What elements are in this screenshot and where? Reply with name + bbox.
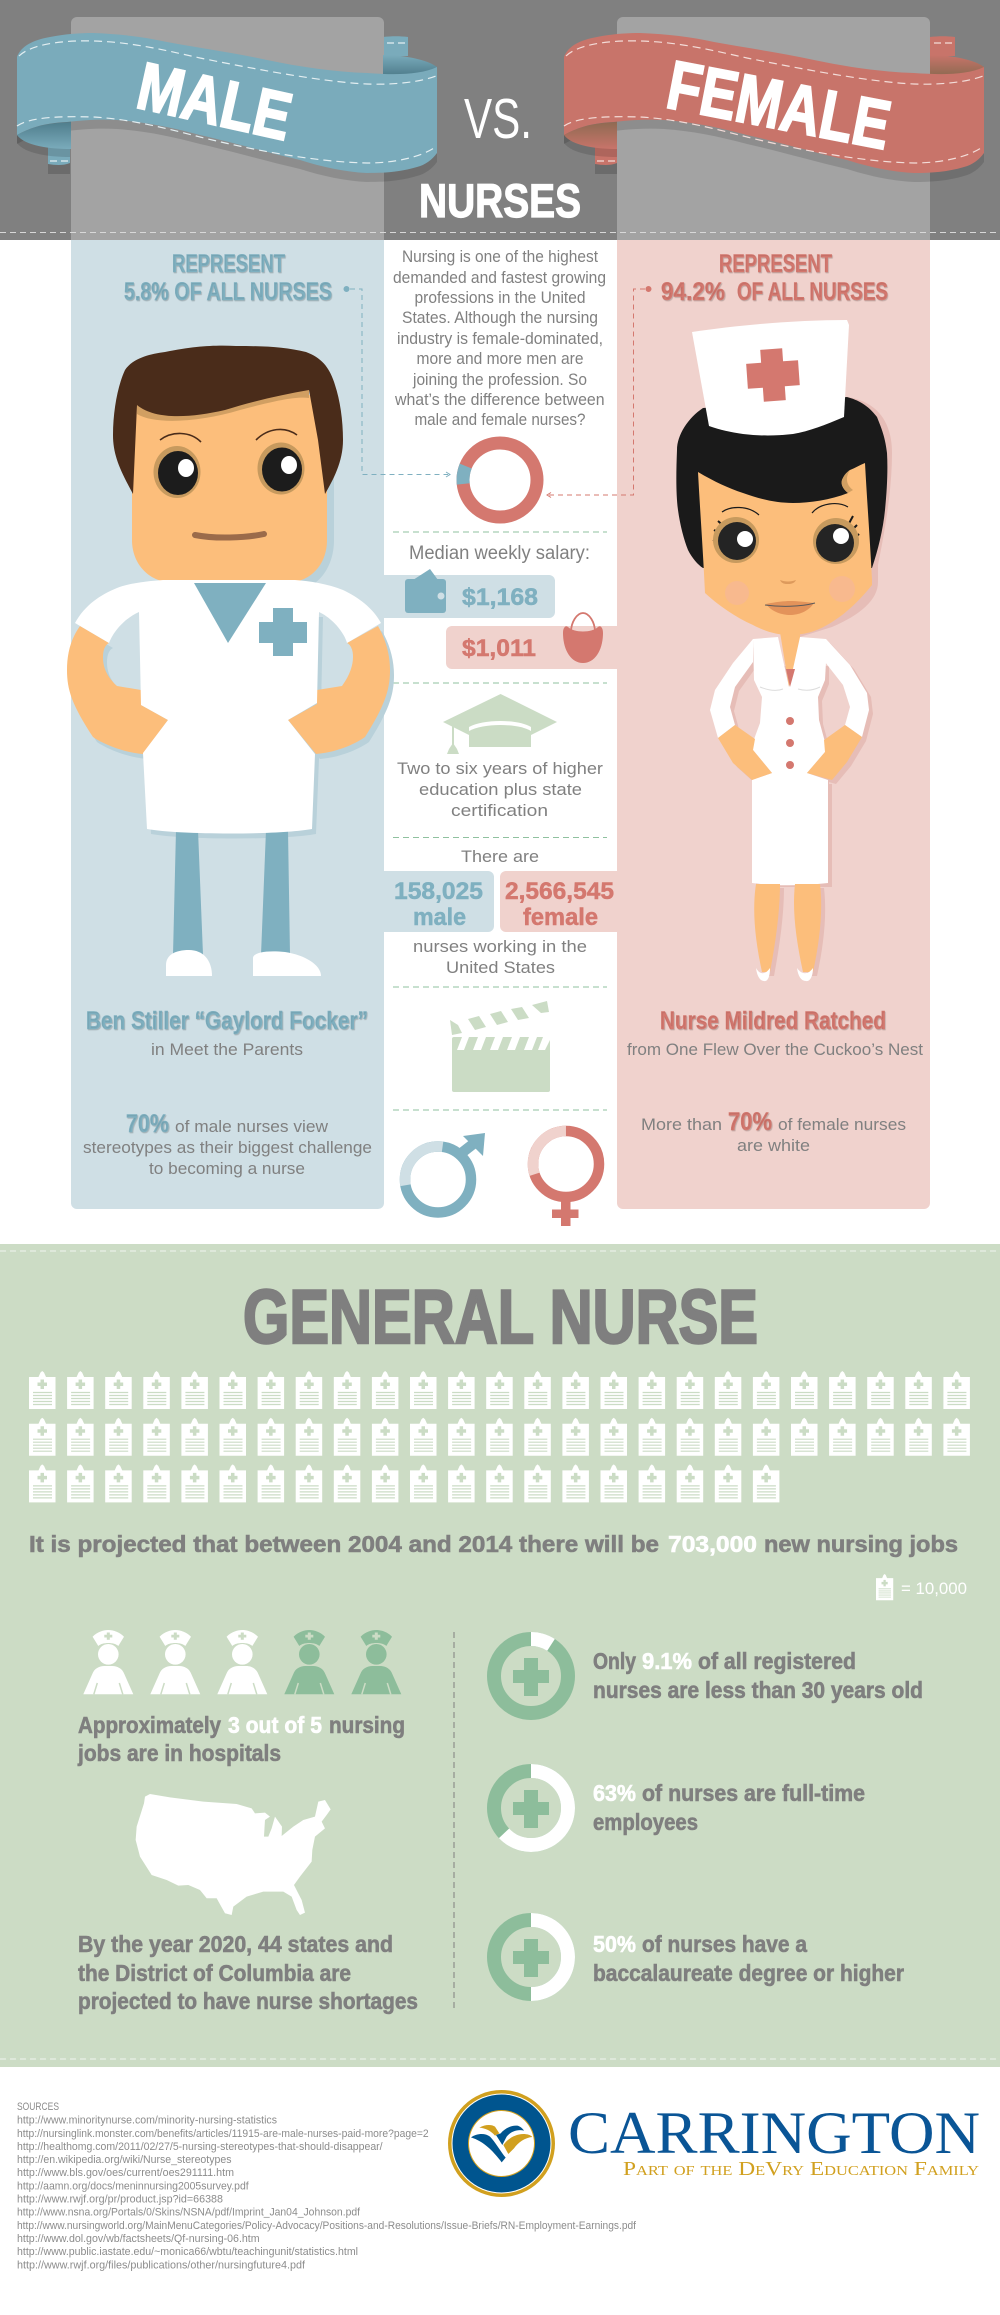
intro paragraph: male and female nurses?: [414, 410, 586, 429]
text: 63%: 63%: [593, 1780, 636, 1806]
caption: Nurse Ratched: from One Flew Over the Cuckoo’s Nest: [627, 1040, 923, 1059]
text: shortages: the District of Columbia are: [78, 1960, 351, 1986]
icon: graduation cap: [443, 694, 557, 754]
count box: male: [384, 871, 494, 932]
text: education: education plus state: [419, 780, 582, 799]
eyes: [154, 442, 304, 498]
icon: purse: [563, 613, 603, 663]
lips: [766, 601, 814, 615]
count box: female: female: [523, 904, 598, 931]
text: working in the US: nurses working in the: [413, 937, 587, 956]
uniform: [710, 637, 869, 885]
legs: [754, 884, 821, 972]
sources: http://healthomg.com/2011/02/27/5-nursing-stereotypes-that-should-disappear/: [17, 2141, 384, 2153]
text: projected jobs: new nursing jobs: [764, 1531, 958, 1557]
intro paragraph: more and more men are: [416, 349, 584, 368]
icon: female symbol: [524, 1122, 608, 1226]
stat: male stereotypes: to becoming a nurse: [149, 1159, 305, 1178]
stat: female race: of female nurses: [778, 1115, 906, 1134]
text: education: [397, 759, 603, 820]
text: projected jobs: [29, 1531, 958, 1557]
title: NURSES: NURSES: [419, 174, 581, 227]
heading: general nurse: GENERAL NURSE: [243, 1275, 758, 1360]
sources: http://www.minoritynurse.com/minority-nursing-statistics: [17, 2114, 277, 2126]
sources: http://www.rwjf.org/pr/product.jsp?id=66388: [17, 2194, 223, 2206]
count box: male: male: [413, 904, 466, 931]
text: projected jobs: 703,000: [668, 1531, 757, 1557]
shadows of arms and coat: [71, 617, 394, 838]
chest cross: [259, 608, 307, 656]
sources: SOURCES: [17, 2101, 59, 2113]
text: hospitals: 3 out of 5: [228, 1712, 322, 1738]
text: education: Two to six years of higher: [397, 759, 603, 778]
legend: clipboard = 10,000: = 10,000: [901, 1579, 967, 1598]
title: FEMALE: FEMALE: [661, 46, 897, 164]
head shadow: [138, 400, 334, 590]
stat: male represent: [124, 250, 332, 306]
text: 63%: [593, 1780, 865, 1835]
illustration: female nurse: [676, 320, 892, 981]
ribbon tails: male: [48, 36, 408, 174]
text: projected jobs: It is projected that between 2004 and 2014 there will be: [29, 1531, 659, 1557]
mouth: [195, 534, 264, 538]
text: 50%: baccalaureate degree or higher: [593, 1960, 904, 1986]
stat: male stereotypes: 70%: [126, 1110, 169, 1138]
head: [132, 395, 327, 583]
pictogram: 70 clipboards: [29, 1371, 970, 1502]
text: working in the US: United States: [446, 958, 555, 977]
text: 63%: employees: [593, 1809, 698, 1835]
buttons: [786, 717, 794, 769]
sources: http://nursinglink.monster.com/benefits/articles/11915-are-male-nurses-paid-more?page=2: [17, 2128, 429, 2140]
sources: http://en.wikipedia.org/wiki/Nurse_stereotypes: [17, 2154, 232, 2166]
text: education: certification: [451, 801, 548, 820]
intro paragraph: joining the profession. So: [412, 370, 587, 389]
intro paragraph: industry is female-dominated,: [397, 329, 603, 348]
ribbon: female: [564, 33, 984, 182]
title: MALE: MALE: [131, 48, 298, 155]
chart: 9.1% donut: [494, 1639, 568, 1713]
coat: [75, 580, 381, 834]
pictogram: nurses 3 of 5: [83, 1630, 401, 1694]
logo: Carrington emblem: [448, 2090, 555, 2197]
sources: http://www.dol.gov/wb/factsheets/Qf-nursing-06.htm: [17, 2233, 260, 2245]
text: hospitals: [77, 1712, 405, 1766]
text: there are: There are: [461, 847, 539, 866]
arms: [67, 626, 390, 754]
stat: female represent: OF ALL NURSES: [737, 278, 888, 306]
caption: Nurse Ratched: Nurse Mildred Ratched: [660, 1007, 886, 1035]
connector: female arrow: [547, 286, 651, 498]
text: 50%: [593, 1931, 904, 1986]
text: hospitals: nursing: [329, 1712, 405, 1738]
text: 63%: of nurses are full-time: [642, 1780, 865, 1806]
heading: salary: Median weekly salary:: [409, 543, 590, 564]
text: 50%: of nurses have a: [642, 1931, 807, 1957]
sources: http://www.bls.gov/oes/current/oes291111.htm: [17, 2167, 234, 2179]
stat: male stereotypes: stereotypes as their biggest challenge: [83, 1138, 372, 1157]
caption: Ben Stiller: in Meet the Parents: [151, 1040, 303, 1059]
salary box: female: [446, 613, 617, 669]
panel: male background: [71, 17, 384, 1209]
stat: female represent: REPRESENT: [719, 250, 832, 278]
text: 9.1%: nurses are less than 30 years old: [593, 1677, 923, 1703]
caption: Ben Stiller: [86, 1007, 368, 1059]
text: shortages: projected to have nurse shortages: [78, 1988, 418, 2014]
stat: male represent: 5.8% OF ALL NURSES: [124, 278, 332, 306]
text: 9.1%: Only: [593, 1648, 636, 1674]
uniform shadow: [714, 643, 873, 976]
text: hospitals: Approximately: [78, 1712, 221, 1738]
logo: Carrington wordmark: Part of the DeVry Education Family: [623, 2158, 979, 2180]
neck: [778, 620, 800, 687]
hair: [113, 346, 343, 494]
text: 50%: 50%: [593, 1931, 636, 1957]
sources: http://www.nursingworld.org/MainMenuCategories/Policy-Advocacy/Positions-and-Resolutions/Issue-Briefs/RN-Employment-Earnings.pdf: [17, 2220, 637, 2232]
stat: female race: [641, 1108, 906, 1155]
shoes: [756, 968, 813, 981]
stat: male stereotypes: of male nurses view: [175, 1117, 329, 1136]
head shadow: [770, 397, 892, 640]
text: 9.1%: of all registered: [698, 1648, 856, 1674]
logo: Carrington wordmark: CARRINGTON: [568, 2100, 980, 2166]
panel: general nurse: [0, 1244, 1000, 2067]
stat: female represent: 94.2%: [661, 278, 725, 306]
legs: [173, 830, 290, 955]
count box: female: [500, 871, 617, 932]
text: working in the US: [413, 937, 587, 977]
caption: Nurse Ratched: [627, 1007, 923, 1059]
intro paragraph: [393, 247, 606, 429]
hat cross: [745, 347, 801, 403]
sources: [17, 2101, 637, 2272]
count box: female: 2,566,545: [505, 878, 614, 905]
stat: female race: are white: [737, 1136, 810, 1155]
nose: [780, 580, 796, 584]
hands: [718, 725, 862, 780]
salary box: male: [384, 569, 555, 618]
icon: clapperboard: [450, 1001, 550, 1092]
salary box: male: $1,168: [462, 584, 538, 611]
brows: [160, 429, 297, 442]
face: [698, 463, 872, 635]
chart: 63% donut: [494, 1771, 568, 1845]
title: VS.: VS.: [464, 87, 532, 151]
blush: [725, 576, 855, 605]
sources: http://aamn.org/docs/meninnursing2005survey.pdf: [17, 2180, 250, 2192]
text: shortages: [78, 1931, 418, 2014]
sources: http://www.public.iastate.edu/~monica66/wbtu/teachingunit/statistics.html: [17, 2246, 358, 2258]
legend: clipboard = 10,000: [876, 1574, 967, 1600]
shoes: [166, 950, 321, 976]
count box: male: 158,025: [394, 878, 483, 905]
sources: http://www.nsna.org/Portals/0/Skins/NSNA/pdf/Imprint_Jan04_Johnson.pdf: [17, 2207, 361, 2219]
stat: male stereotypes: [83, 1110, 372, 1178]
icon: wallet: [405, 569, 446, 613]
illustration: male nurse: [67, 346, 394, 976]
ribbon: male: [17, 33, 437, 182]
map: United States: [136, 1794, 331, 1915]
bust lines: [760, 687, 820, 690]
panel: female background: [617, 17, 930, 1209]
curl shade: [842, 470, 853, 493]
stat: female represent: [661, 250, 888, 306]
salary box: female: $1,011: [462, 635, 536, 662]
eyes: [713, 516, 859, 564]
text: shortages: By the year 2020, 44 states and: [78, 1931, 393, 1957]
ribbon tails: female: [595, 36, 955, 174]
text: 9.1%: 9.1%: [642, 1648, 692, 1674]
chart: share donut: [463, 443, 537, 517]
stat: female race: More than: [641, 1115, 722, 1134]
text: hospitals: jobs are in hospitals: [77, 1740, 281, 1766]
stat: male represent: REPRESENT: [172, 250, 285, 278]
hat: [692, 320, 849, 436]
neckline: [786, 669, 795, 687]
intro paragraph: what’s the difference between: [394, 390, 605, 409]
chart: 50% donut: [494, 1920, 568, 1994]
header band: [0, 0, 1000, 240]
stat: female race: 70%: [728, 1108, 772, 1136]
intro paragraph: Nursing is one of the highest: [402, 247, 598, 266]
connector: male arrow: [344, 286, 450, 477]
intro paragraph: States. Although the nursing: [402, 308, 598, 327]
sources: http://www.rwjf.org/files/publications/other/nursingfuture4.pdf: [17, 2260, 306, 2272]
intro paragraph: demanded and fastest growing: [393, 268, 606, 287]
hair band shadow: [137, 388, 309, 421]
caption: Ben Stiller: Ben Stiller “Gaylord Focker”: [86, 1007, 368, 1035]
brows: [722, 504, 848, 515]
hair: [676, 397, 887, 568]
collar: [194, 583, 266, 643]
icon: male symbol: [400, 1133, 485, 1218]
text: 9.1%: [593, 1648, 923, 1703]
intro paragraph: professions in the United: [414, 288, 586, 307]
